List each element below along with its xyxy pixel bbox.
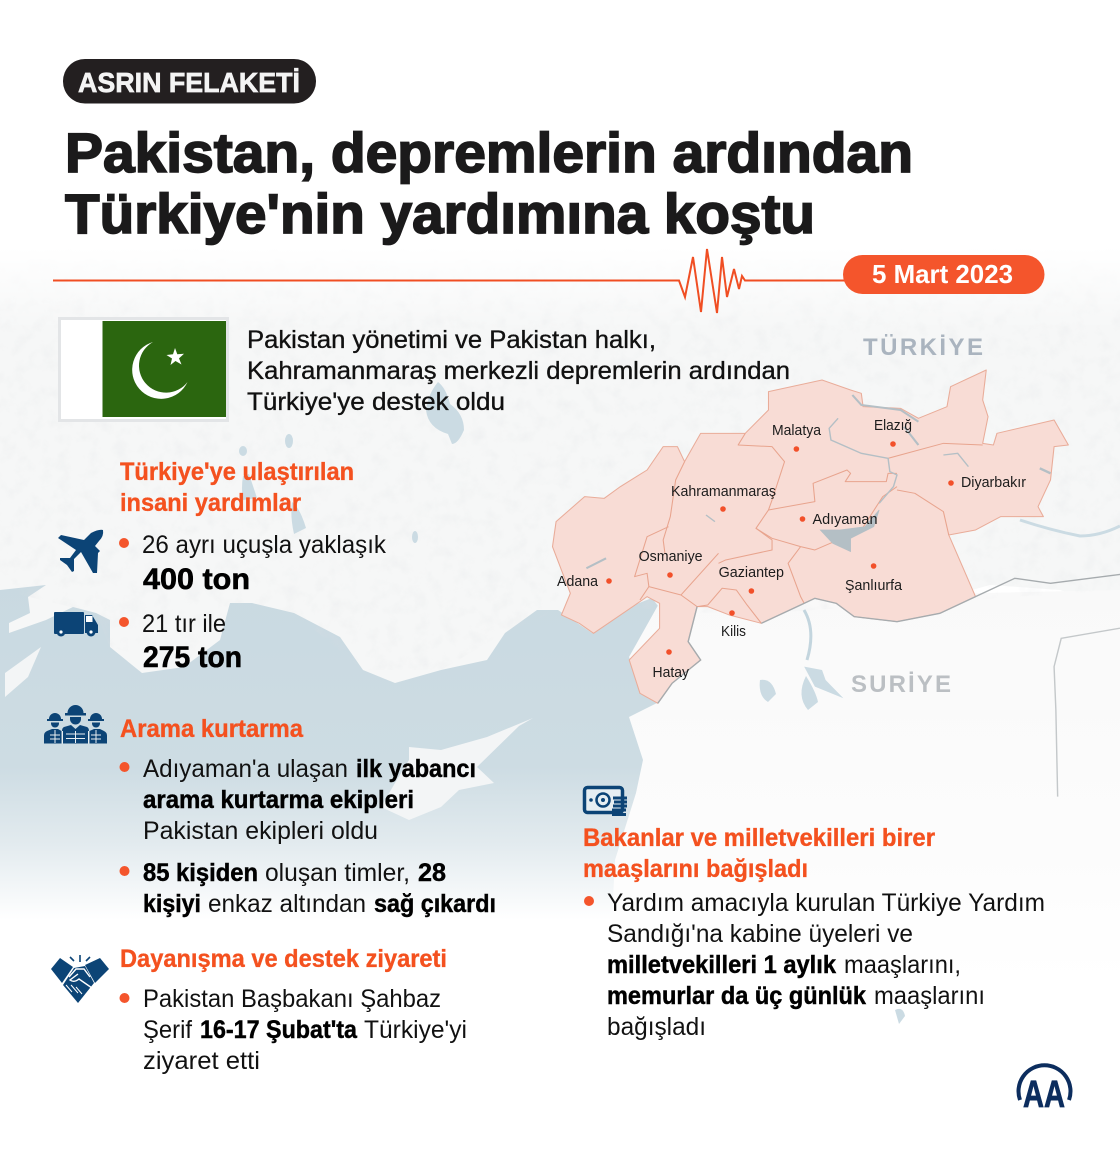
text: donation fund: maaşlarını bbox=[874, 982, 985, 1010]
title bbox=[65, 121, 913, 245]
title: Türkiye'nin yardımına koştu bbox=[65, 182, 815, 245]
text: 85 people, 28 rescued: 85 kişiden bbox=[143, 859, 258, 887]
text: first foreign teams: arama kurtarma ekipleri bbox=[143, 786, 414, 814]
text: 85 people, 28 rescued: enkaz altından bbox=[208, 890, 366, 918]
section: humanitarian aid bbox=[54, 458, 386, 674]
city labels and markers: Kahramanmaraş bbox=[671, 484, 776, 500]
text: PM visit: Türkiye'yi bbox=[364, 1016, 467, 1044]
city labels and markers: Osmaniye bbox=[639, 549, 703, 565]
text: donation fund bbox=[607, 889, 1045, 1041]
text: donation fund: memurlar da üç günlük bbox=[607, 982, 866, 1010]
text: PM visit bbox=[143, 985, 467, 1075]
land: Syria and Levant bbox=[600, 590, 1120, 1150]
city labels and markers: Şanlıurfa bbox=[845, 578, 903, 594]
logo: Anadolu Agency: AA bbox=[1023, 1074, 1065, 1116]
bullet bbox=[120, 993, 130, 1003]
heading: aid: insani yardımlar bbox=[120, 489, 301, 517]
number: 400 ton: 400 ton bbox=[143, 563, 250, 596]
text: donation fund: Yardım amacıyla kurulan Türkiye Yardım bbox=[607, 889, 1045, 917]
section: salary donations bbox=[583, 788, 1045, 1041]
icon: rescue workers bbox=[44, 705, 107, 744]
heading: salaries bbox=[583, 824, 935, 883]
intro text: Kahramanmaraş merkezli depremlerin ardından bbox=[247, 357, 790, 385]
text: trucks: 21 tır ile bbox=[142, 610, 226, 638]
province shape bbox=[552, 370, 1068, 703]
text: first foreign teams: Adıyaman'a ulaşan bbox=[143, 755, 348, 783]
bullet bbox=[119, 538, 129, 548]
text: donation fund: bağışladı bbox=[607, 1013, 706, 1041]
text: PM visit: ziyaret etti bbox=[143, 1047, 260, 1075]
icon: handshake bbox=[51, 955, 109, 1003]
section: solidarity visit bbox=[51, 945, 467, 1075]
icon: truck bbox=[54, 612, 98, 636]
text: donation fund: Sandığı'na kabine üyeleri ve bbox=[607, 920, 913, 948]
reservoirs and rivers bbox=[586, 395, 1051, 568]
sea bbox=[0, 580, 680, 920]
date badge: 5 Mart 2023 bbox=[872, 259, 1013, 289]
city labels and markers: Malatya bbox=[772, 423, 822, 439]
province borders bbox=[635, 433, 983, 623]
borders of Syria and Iraq bbox=[658, 573, 1120, 797]
tag: Asrın Felaketi: ASRIN FELAKETİ bbox=[78, 67, 300, 98]
text: 85 people, 28 rescued: sağ çıkardı bbox=[374, 890, 496, 918]
number: 275 ton: 275 ton bbox=[143, 641, 242, 674]
text: 85 people, 28 rescued: oluşan timler, bbox=[265, 859, 410, 887]
seismograph line bbox=[53, 249, 850, 313]
intro text: Pakistan yönetimi ve Pakistan halkı, bbox=[247, 326, 656, 354]
heading: solidarity: Dayanışma ve destek ziyareti bbox=[120, 945, 447, 973]
map: earthquake provinces bbox=[552, 370, 1120, 797]
bullet bbox=[119, 617, 129, 627]
bullet bbox=[120, 762, 130, 772]
city labels and markers: Elazığ bbox=[874, 418, 912, 434]
title: Pakistan, depremlerin ardından bbox=[65, 121, 913, 184]
intro text bbox=[247, 326, 790, 416]
text: 85 people, 28 rescued: kişiyi bbox=[143, 890, 201, 918]
text: first foreign teams bbox=[143, 755, 476, 845]
land: Anatolia bbox=[0, 230, 1120, 683]
city labels and markers: Kilis bbox=[721, 624, 746, 640]
text: donation fund: maaşlarını, bbox=[844, 951, 961, 979]
text: flights: 26 ayrı uçuşla yaklaşık bbox=[142, 531, 386, 559]
intro text: Türkiye'ye destek oldu bbox=[247, 388, 505, 416]
date badge bbox=[843, 255, 1044, 294]
city labels and markers bbox=[557, 418, 1026, 681]
logo: Anadolu Agency bbox=[1018, 1065, 1070, 1116]
land: Rhodes bbox=[5, 647, 41, 697]
city labels and markers: Diyarbakır bbox=[961, 475, 1026, 491]
terrain texture bbox=[0, 230, 1120, 670]
lakes bbox=[239, 382, 905, 1024]
heading: search and rescue: Arama kurtarma bbox=[120, 715, 304, 743]
land: Cyprus bbox=[381, 718, 533, 820]
city labels and markers: Adıyaman bbox=[812, 512, 878, 528]
tag: Asrın Felaketi bbox=[63, 59, 316, 104]
heading: aid bbox=[120, 458, 354, 517]
text: first foreign teams: ilk yabancı bbox=[356, 755, 476, 783]
city labels and markers: Gaziantep bbox=[719, 565, 784, 581]
text: 85 people, 28 rescued: 28 bbox=[418, 859, 446, 887]
country label: Türkiye: TÜRKİYE bbox=[863, 334, 983, 361]
text: first foreign teams: Pakistan ekipleri oldu bbox=[143, 817, 378, 845]
text: donation fund: milletvekilleri 1 aylık bbox=[607, 951, 836, 979]
heading: salaries: maaşlarını bağışladı bbox=[583, 855, 808, 883]
text: 85 people, 28 rescued bbox=[143, 859, 496, 918]
bullet bbox=[584, 896, 594, 906]
country label: Suriye: SURİYE bbox=[851, 671, 951, 698]
heading: salaries: Bakanlar ve milletvekilleri birer bbox=[583, 824, 935, 852]
icon: plane bbox=[58, 530, 103, 573]
bullet bbox=[120, 866, 130, 876]
text: PM visit: Şerif bbox=[143, 1016, 192, 1044]
city labels and markers: Hatay bbox=[652, 665, 690, 681]
text: PM visit: Pakistan Başbakanı Şahbaz bbox=[143, 985, 441, 1013]
text: PM visit: 16-17 Şubat'ta bbox=[200, 1016, 358, 1044]
icon: money bbox=[584, 788, 627, 814]
section: search and rescue bbox=[44, 705, 496, 918]
city labels and markers: Adana bbox=[557, 574, 599, 590]
top white fade bbox=[0, 0, 1120, 330]
heading: aid: Türkiye'ye ulaştırılan bbox=[120, 458, 354, 486]
icon: Pakistan flag bbox=[60, 318, 228, 420]
